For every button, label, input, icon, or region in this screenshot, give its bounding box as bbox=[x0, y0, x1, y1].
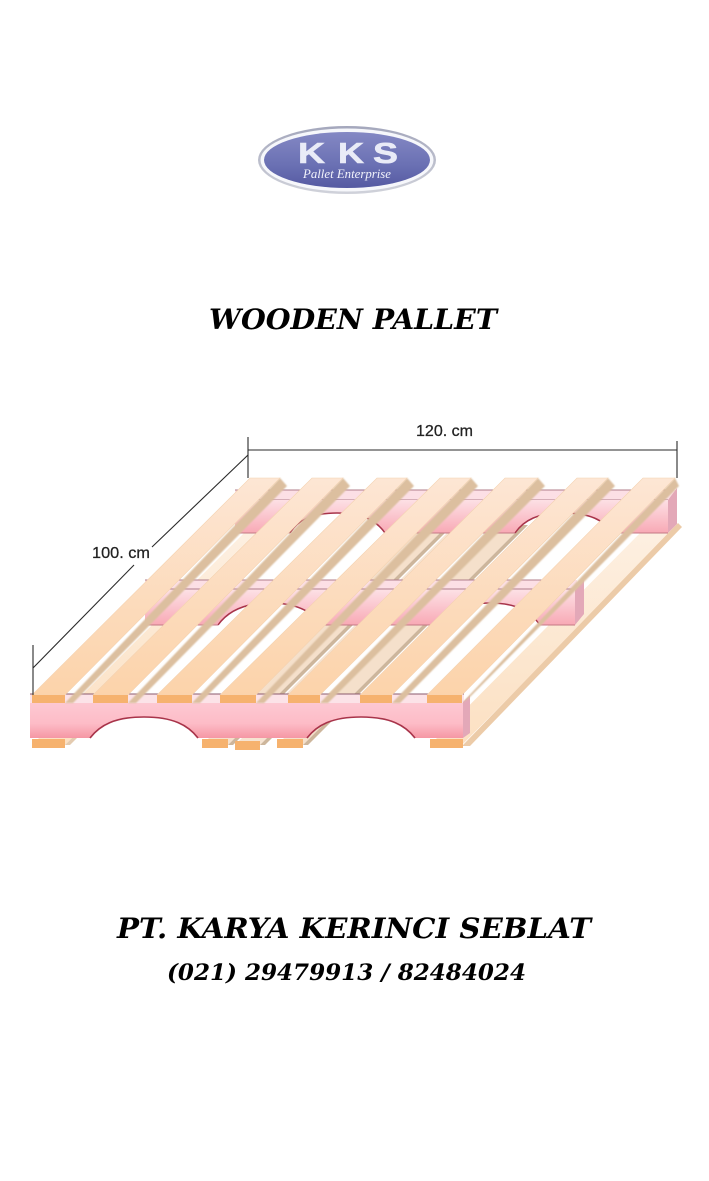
middle stringer bbox=[145, 580, 584, 625]
back stringer bbox=[235, 488, 677, 533]
pallet diagram bbox=[30, 423, 682, 750]
front ends of bottom boards bbox=[32, 739, 463, 750]
phone numbers: (021) 29479913 / 82484024 bbox=[167, 960, 526, 986]
bottom deck boards bbox=[32, 523, 682, 746]
dimension: 100 cm: 100. cm bbox=[92, 545, 150, 562]
logo: KKS Pallet Enterprise: K bbox=[298, 138, 325, 170]
logo: KKS Pallet Enterprise: S bbox=[373, 138, 398, 170]
logo: KKS Pallet Enterprise: K bbox=[338, 138, 364, 170]
front stringer bbox=[30, 694, 470, 738]
logo: KKS Pallet Enterprise bbox=[258, 126, 436, 194]
title: WOODEN PALLET bbox=[209, 303, 499, 336]
top deck slats bbox=[32, 478, 675, 695]
slat front ends bbox=[32, 695, 462, 703]
company name: PT. KARYA KERINCI SEBLAT bbox=[116, 912, 593, 945]
dimension: 100 cm bbox=[33, 455, 248, 695]
logo: KKS Pallet Enterprise: Pallet Enterprise bbox=[302, 166, 391, 181]
dimension: 120 cm: 120. cm bbox=[416, 423, 473, 440]
top deck slat shadows bbox=[65, 478, 679, 703]
dimension: 120 cm bbox=[248, 423, 677, 478]
